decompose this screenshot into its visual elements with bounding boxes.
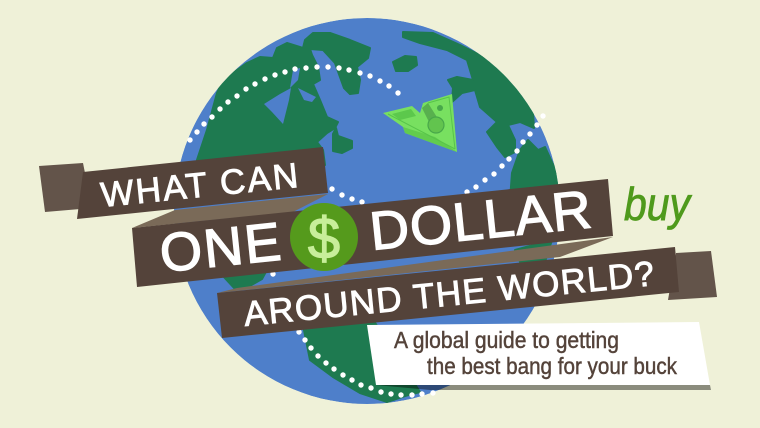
- text: dollar: DOLLAR: [367, 179, 594, 262]
- dotted flight path: [187, 64, 546, 398]
- continent: south america: [303, 315, 420, 402]
- text: around the world: AROUND THE WORLD?: [242, 254, 656, 334]
- ribbon band: [77, 147, 328, 219]
- ribbon band: [217, 247, 679, 338]
- panel: [367, 322, 710, 385]
- ribbon tail: [668, 251, 717, 300]
- ribbon band: [132, 179, 613, 287]
- text: what can: WHAT CAN: [99, 156, 300, 215]
- continent: africa edge: [515, 240, 552, 262]
- island: florida: [333, 128, 352, 153]
- ribbon: what can: [39, 147, 328, 228]
- icon: dollar coin: [290, 203, 358, 271]
- word: buy: buy: [624, 178, 693, 230]
- globe: [174, 18, 562, 404]
- icon: dollar coin: $: [308, 206, 340, 271]
- subtitle line two: the best bang for your buck: [427, 353, 677, 379]
- continent: australia: [510, 139, 558, 189]
- panel shadow: [376, 385, 711, 390]
- ribbon fold: [132, 194, 328, 228]
- continent: central america: [223, 273, 266, 289]
- ribbon tail: [39, 163, 92, 212]
- ribbon: around the world: [217, 247, 717, 338]
- subtitle line one: A global guide to getting: [394, 327, 619, 353]
- subtitle panel: [367, 322, 711, 390]
- icon: folded dollar paper plane: [383, 94, 457, 152]
- ribbon: one dollar: [132, 179, 613, 293]
- ribbon fold: [217, 237, 613, 293]
- hudson bay: [264, 68, 316, 124]
- island: north atlantic: [393, 56, 417, 71]
- text: one: ONE: [157, 212, 284, 284]
- continent: eurasia: [403, 32, 534, 157]
- continent: north america and greenland: [196, 32, 371, 166]
